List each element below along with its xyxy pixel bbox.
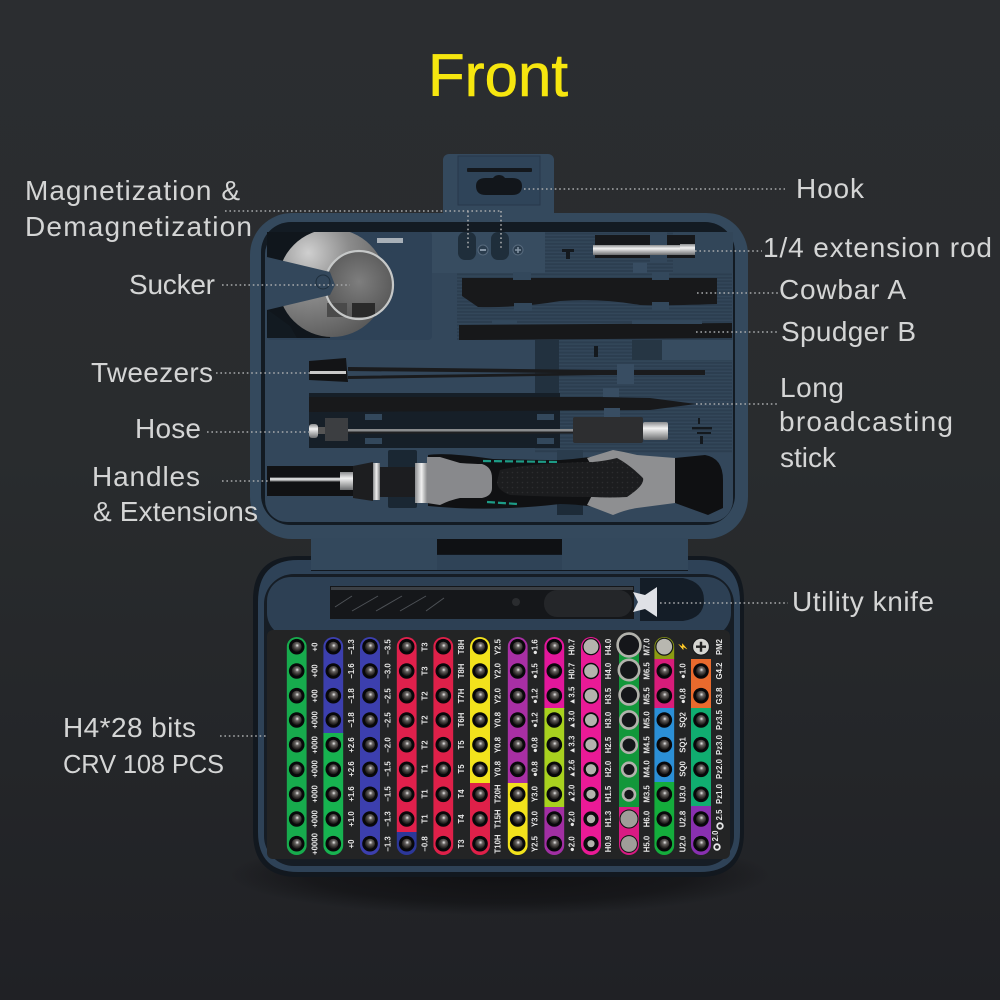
labels column 1: +00: [310, 664, 320, 678]
labels column 8: ▲3.3: [568, 735, 576, 754]
bit size labels: [310, 638, 724, 855]
labels column 8: ▲3.0: [568, 710, 576, 729]
label: magnetization: [25, 175, 252, 242]
labels column 11: ●0.8: [678, 688, 688, 704]
label: magnetization: Magnetization &: [25, 175, 240, 206]
long broadcasting stick and hose recess: [309, 388, 696, 448]
labels column 7: Y3.0: [530, 785, 540, 802]
strip column 2: [323, 637, 343, 855]
strip column 8: [544, 637, 564, 855]
labels column 9: H2.0: [604, 760, 613, 777]
labels column 8: ▲2.0: [568, 784, 576, 803]
labels column 9: H1.3: [604, 810, 613, 827]
labels column 6: [494, 638, 502, 854]
label: handles and extensions: Handles: [92, 461, 200, 492]
label: tweezers: Tweezers: [91, 357, 213, 388]
labels column 11: SQ0: [678, 761, 688, 777]
tweezers: [309, 358, 705, 384]
label: long broadcasting stick: Long: [780, 372, 844, 403]
labels column 9: H1.5: [604, 785, 613, 802]
labels column 6: Y0.8: [494, 760, 502, 777]
labels column 6: T20H: [494, 784, 502, 804]
solid bits column 10: [620, 810, 638, 852]
utility knife: [330, 578, 704, 621]
icon: spudger mark: [594, 346, 598, 357]
labels column 6: Y2.0: [494, 662, 502, 679]
labels column 11: ●1.0: [678, 663, 688, 679]
spudger: [457, 318, 732, 340]
labels column 10: M6.5: [642, 662, 652, 680]
labels column 1: +000: [310, 760, 320, 778]
labels column 10: H5.0: [642, 835, 652, 852]
phillips bit column 12: [693, 638, 709, 655]
labels column 7: ●1.6: [530, 639, 540, 655]
label: long broadcasting stick: stick: [780, 442, 837, 473]
labels column 12: Pz3.0: [715, 734, 724, 755]
label: bits: CRV 108 PCS: [63, 751, 224, 779]
labels column 3: −3.5: [384, 639, 392, 655]
labels column 12: G4.2: [715, 662, 724, 679]
hook tab: [443, 154, 554, 224]
labels column 10: M4.5: [642, 736, 652, 754]
labels column 3: −1.5: [384, 761, 392, 777]
labels column 8: ●2.0: [568, 811, 576, 827]
labels column 12: Pz1.0: [715, 783, 724, 804]
label: hook: Hook: [796, 173, 865, 204]
labels column 12: [711, 638, 724, 841]
labels column 4: T1: [420, 764, 430, 774]
strip column 10: [619, 637, 639, 855]
labels column 9: H4.0: [604, 662, 613, 679]
labels column 7: ●1.2: [530, 712, 540, 728]
strip column 3: [360, 637, 380, 855]
labels column 9: H0.9: [604, 835, 613, 852]
strip column 11: [654, 637, 674, 855]
label: bits: H4*28 bits: [63, 712, 196, 743]
labels column 2: −1.8: [347, 688, 356, 704]
torx ring marks: [714, 823, 723, 850]
labels column 8: H0.7: [568, 639, 576, 655]
labels column 8: H0.7: [568, 663, 576, 679]
labels column 8: ▲3.5: [568, 686, 576, 705]
labels column 4: T2: [420, 691, 430, 701]
labels column 9: H2.5: [604, 736, 613, 753]
toolbox: upper lid: [250, 154, 748, 570]
labels column 5: T4: [457, 814, 466, 824]
labels column 5: T5: [457, 764, 466, 774]
labels column 6: T10H: [494, 834, 502, 854]
labels column 3: −2.5: [384, 688, 392, 704]
label: cowbar: Cowbar A: [779, 274, 906, 305]
labels column 4: −0.8: [420, 836, 430, 852]
labels column 9: H4.0: [604, 638, 613, 655]
label: spudger: Spudger B: [781, 316, 916, 347]
labels column 5: T8H: [457, 663, 466, 678]
icon: pin mark: [692, 418, 712, 444]
labels column 12: Pz2.0: [715, 758, 724, 779]
labels column 9: [604, 638, 613, 852]
labels column 10: M7.0: [642, 638, 652, 656]
handle and extensions screwdriver: [267, 450, 723, 515]
labels column 10: M3.5: [642, 785, 652, 803]
label: long broadcasting stick: broadcasting: [779, 406, 953, 437]
labels column 7: [530, 639, 540, 852]
labels column 2: +0: [347, 839, 356, 848]
strip column 1: [287, 637, 307, 855]
labels column 3: [384, 639, 392, 852]
labels column 5: T7H: [457, 688, 466, 703]
labels column 10: M5.0: [642, 711, 652, 729]
labels column 3: −3.0: [384, 663, 392, 679]
labels column 1: +00: [310, 689, 320, 703]
labels column 11: ⚡: [678, 642, 688, 652]
labels column 6: Y2.5: [494, 638, 502, 655]
plate panel behind sucker: [267, 232, 432, 340]
tray shadow: [230, 835, 770, 915]
icon: small tool mark: [562, 249, 574, 259]
labels column 4: T3: [420, 642, 430, 652]
labels column 12: PM2: [715, 638, 724, 655]
labels column 1: +0000: [310, 832, 320, 855]
bit tray: [267, 630, 730, 859]
labels column 2: −1.6: [347, 663, 356, 679]
labels column 7: Y2.5: [530, 835, 540, 852]
labels column 3: −1.3: [384, 811, 392, 827]
strip column 12: [691, 659, 711, 855]
labels column 2: [347, 639, 356, 848]
magnetization slots: [458, 232, 523, 260]
labels column 12: 2.0: [711, 830, 720, 841]
labels column 2: +1.0: [347, 811, 356, 827]
labels column 3: −2.0: [384, 737, 392, 753]
labels column 6: T15H: [494, 809, 502, 829]
labels column 4: T1: [420, 814, 430, 824]
strip column 6: [470, 637, 490, 855]
label: sucker: Sucker: [129, 269, 215, 300]
labels column 3: −1.5: [384, 786, 392, 802]
labels column 10: M5.5: [642, 687, 652, 705]
labels column 10: M4.0: [642, 760, 652, 778]
labels column 10: [642, 638, 652, 852]
crowbar: [457, 272, 732, 318]
label: extension rod: 1/4 extension rod: [763, 232, 992, 263]
labels column 4: [420, 642, 430, 852]
labels column 7: ●1.2: [530, 688, 540, 704]
labels column 3: −2.5: [384, 712, 392, 728]
labels column 11: SQ2: [678, 712, 688, 728]
labels column 1: +0: [310, 642, 320, 651]
labels column 1: +000: [310, 810, 320, 828]
labels column 2: +2.6: [347, 737, 356, 753]
sucker: [267, 228, 394, 340]
labels column 4: T2: [420, 740, 430, 750]
labels column 12: 2.5: [715, 809, 724, 820]
labels column 11: SQ1: [678, 737, 688, 753]
labels column 1: [310, 642, 320, 855]
extension rod: [593, 232, 695, 275]
labels column 1: +000: [310, 785, 320, 803]
labels column 5: T5: [457, 740, 466, 750]
labels column 8: ●2.0: [568, 836, 576, 852]
label: utility knife: Utility knife: [792, 586, 934, 617]
title: Front: [428, 42, 568, 109]
label: magnetization: Demagnetization: [25, 211, 252, 242]
labels column 6: Y2.0: [494, 687, 502, 704]
strip column 4: [397, 637, 417, 855]
labels column 8: ▲2.6: [568, 759, 576, 778]
labels column 5: T6H: [457, 712, 466, 727]
labels column 8: [568, 639, 576, 852]
labels column 7: ●1.5: [530, 663, 540, 679]
labels column 2: +1.6: [347, 786, 356, 802]
labels column 2: +2.6: [347, 761, 356, 777]
ribbed recesses: [545, 232, 732, 276]
labels column 9: H3.5: [604, 687, 613, 704]
labels column 5: T3: [457, 839, 466, 849]
labels column 11: U3.0: [678, 785, 688, 802]
labels column 11: U2.0: [678, 835, 688, 852]
labels column 10: H6.0: [642, 810, 652, 827]
labels column 9: H3.0: [604, 711, 613, 728]
label: handles and extensions: & Extensions: [93, 496, 258, 527]
hinge tabs upper: [311, 538, 437, 570]
labels column 7: Y3.0: [530, 810, 540, 827]
label: bits: [63, 712, 224, 779]
hex bits column 9: [582, 638, 600, 851]
labels column 12: G3.8: [715, 687, 724, 704]
bit sockets: [289, 639, 709, 852]
labels column 3: −1.3: [384, 836, 392, 852]
grey bit column 11: [656, 638, 673, 655]
labels column 5: T8H: [457, 639, 466, 654]
labels column 4: T2: [420, 715, 430, 725]
labels column 6: Y0.8: [494, 736, 502, 753]
labels column 1: +000: [310, 711, 320, 729]
labels column 2: −1.8: [347, 712, 356, 728]
label: handles and extensions: [92, 461, 258, 527]
labels column 2: −1.3: [347, 639, 356, 655]
labels column 7: ●0.8: [530, 761, 540, 777]
labels column 7: ●0.8: [530, 737, 540, 753]
nut setter bits column 10: [618, 634, 640, 800]
strip column 5: [433, 637, 453, 855]
labels column 11: [678, 642, 688, 852]
leader lines: [207, 189, 788, 736]
label: hose: Hose: [135, 413, 201, 444]
label: long broadcasting stick: [779, 372, 953, 473]
toolbox: lower tray: [253, 554, 744, 877]
strip column 9: [581, 637, 601, 855]
labels column 12: Pz3.5: [715, 709, 724, 730]
labels column 5: T4: [457, 789, 466, 799]
labels column 6: Y0.8: [494, 711, 502, 728]
labels column 5: [457, 639, 466, 849]
labels column 4: T1: [420, 789, 430, 799]
strip column 7: [508, 637, 528, 855]
lid plate: [265, 232, 733, 522]
sucker tag: [377, 238, 403, 243]
labels column 1: +000: [310, 736, 320, 754]
hose: [309, 414, 668, 444]
labels column 4: T3: [420, 666, 430, 676]
lid shell: [250, 213, 748, 539]
labels column 11: U2.8: [678, 810, 688, 827]
